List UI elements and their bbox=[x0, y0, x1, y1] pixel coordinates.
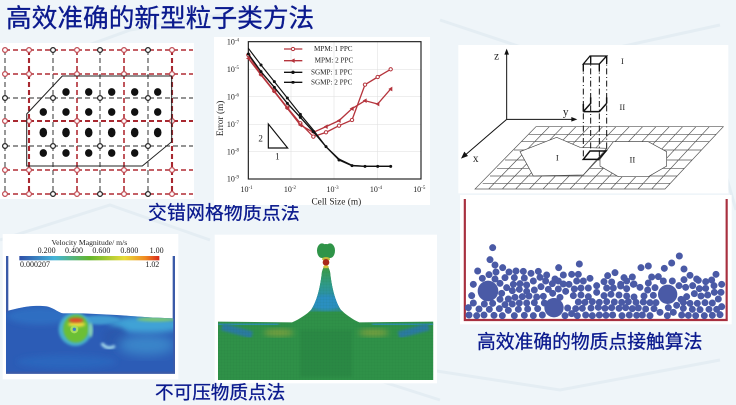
axis tick labels: 10 bbox=[327, 185, 335, 194]
axis titles: Error (m) bbox=[215, 101, 226, 136]
series markers: SGMP bbox=[248, 54, 391, 166]
region I: I bbox=[556, 152, 559, 162]
axis tick labels: -5 bbox=[421, 186, 426, 191]
grid lines bbox=[5, 50, 193, 194]
series: MPM 1 PPC bbox=[247, 53, 392, 138]
axis tick labels: 10 bbox=[227, 148, 235, 157]
legend: MPM: 1 PPC bbox=[314, 45, 353, 53]
region II: II bbox=[629, 154, 635, 164]
axis tick labels: 10 bbox=[227, 65, 235, 74]
panel: 3D contact grid diagram bbox=[458, 45, 728, 193]
slope triangle: 2 bbox=[258, 134, 263, 144]
panel: particle contact simulation bbox=[460, 195, 732, 324]
axis tick labels: -5 bbox=[235, 66, 240, 71]
legend bbox=[284, 45, 353, 87]
velocity legend: 0.600 bbox=[92, 246, 110, 255]
velocity legend: Velocity Magnitude/ m/s bbox=[51, 238, 127, 247]
panel: staggered grid diagram bbox=[0, 43, 194, 199]
heading: staggered grid method: 交错网格物质点法 bbox=[148, 202, 300, 223]
panel: incompressible flow velocity field bbox=[3, 234, 183, 379]
small particles bbox=[468, 248, 722, 316]
plot frame bbox=[248, 42, 421, 179]
axis tick labels: -2 bbox=[292, 186, 297, 191]
velocity legend: 1.02 bbox=[145, 260, 159, 269]
legend: SGMP: 2 PPC bbox=[311, 79, 353, 87]
heading: incompressible method: 不可压物质点法 bbox=[155, 382, 285, 403]
velocity legend: 0.400 bbox=[65, 246, 83, 255]
axis tick labels bbox=[227, 38, 426, 194]
coordinate axes bbox=[461, 49, 577, 159]
water field bbox=[6, 305, 183, 373]
tank walls bbox=[7, 256, 174, 373]
body outline bbox=[27, 76, 172, 166]
axis tick labels: 10 bbox=[227, 93, 235, 102]
region II bbox=[600, 142, 667, 177]
axis tick labels: -8 bbox=[235, 149, 240, 154]
axis labels: z bbox=[494, 50, 499, 62]
axis tick labels: -6 bbox=[235, 94, 240, 99]
axis tick labels: 10 bbox=[227, 174, 235, 183]
panel: error convergence chart: Cell Size (m) bbox=[311, 197, 361, 208]
material points bbox=[40, 88, 162, 157]
axis tick labels: -1 bbox=[249, 186, 253, 191]
mound and target block bbox=[218, 263, 435, 381]
series: MPM 2 PPC bbox=[246, 56, 392, 135]
slope triangle: 1 bbox=[275, 151, 280, 161]
series: SGMP 2 PPC bbox=[248, 48, 391, 166]
axis labels: y bbox=[563, 106, 569, 118]
axis labels: x bbox=[473, 153, 479, 165]
velocity legend: 0.000207 bbox=[20, 260, 50, 269]
velocity legend: 0.800 bbox=[120, 246, 138, 255]
axis tick labels: 10 bbox=[370, 185, 378, 194]
axis tick labels: 10 bbox=[413, 185, 421, 194]
axis tick labels: -7 bbox=[235, 121, 240, 126]
plot grid bbox=[248, 42, 421, 179]
axis tick labels: 10 bbox=[284, 185, 292, 194]
container walls bbox=[465, 199, 727, 320]
large particles bbox=[478, 281, 677, 317]
region I bbox=[520, 137, 607, 176]
layer labels bbox=[620, 57, 625, 112]
series: SGMP 1 PPC bbox=[248, 54, 391, 166]
layer labels: II bbox=[620, 103, 625, 112]
heading: contact algorithm: 高效准确的物质点接触算法 bbox=[477, 331, 702, 352]
slope triangle bbox=[258, 124, 288, 161]
jet head bbox=[317, 243, 335, 268]
axis tick labels: -4 bbox=[235, 39, 240, 44]
axis labels bbox=[473, 50, 569, 165]
legend: MPM: 2 PPC bbox=[315, 57, 353, 65]
panel: jet penetration simulation bbox=[215, 235, 437, 383]
axis tick labels: 10 bbox=[227, 38, 235, 47]
axis tick labels: -9 bbox=[235, 175, 240, 180]
panel: error convergence chart bbox=[214, 37, 430, 208]
axis tick labels: 10 bbox=[241, 185, 249, 194]
red nodes bbox=[3, 48, 174, 196]
legend: SGMP: 1 PPC bbox=[311, 68, 353, 76]
velocity legend bbox=[19, 238, 164, 269]
projection column bbox=[583, 56, 607, 159]
velocity legend: 1.00 bbox=[150, 246, 164, 255]
axis tick labels: -4 bbox=[378, 186, 383, 191]
axis tick labels: -3 bbox=[335, 186, 339, 191]
velocity legend: 0.200 bbox=[38, 246, 56, 255]
layer labels: I bbox=[621, 57, 624, 66]
black nodes bbox=[3, 48, 150, 196]
title: 高效准确的新型粒子类方法 bbox=[6, 4, 314, 33]
axis tick labels: 10 bbox=[227, 120, 235, 129]
background grid bbox=[475, 127, 723, 189]
